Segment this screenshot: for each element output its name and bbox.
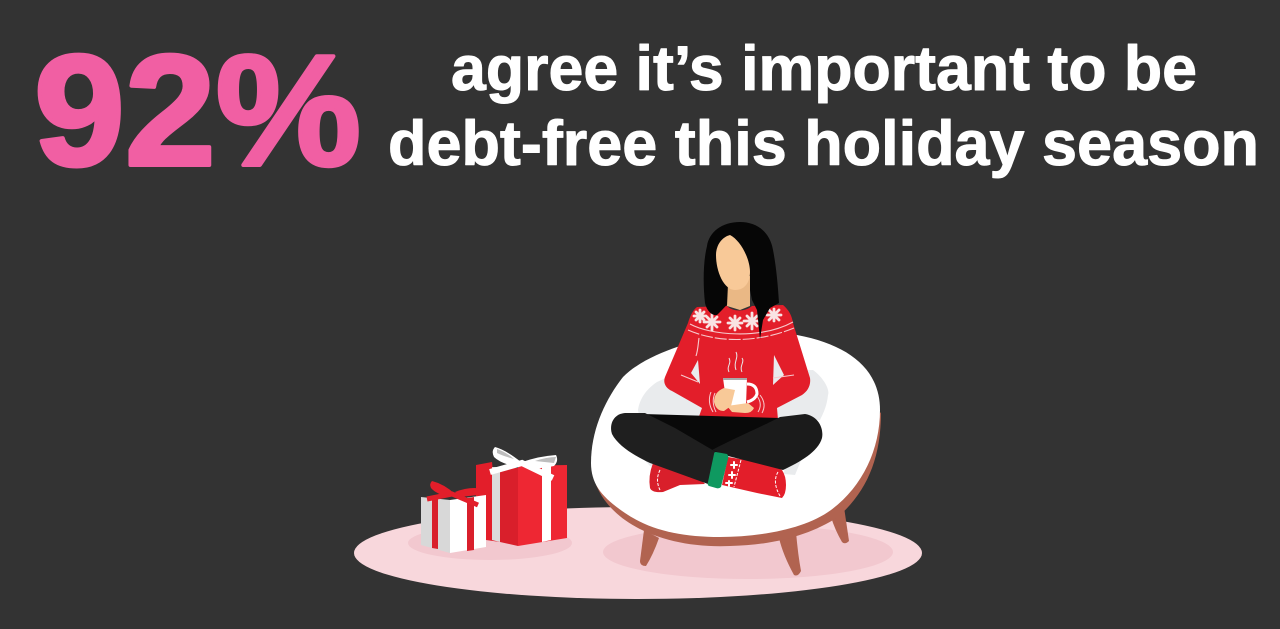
sweater xyxy=(664,305,810,422)
neck xyxy=(727,276,750,310)
statistic: 92%: 92% xyxy=(34,23,361,199)
hair xyxy=(704,222,779,339)
heading: agree it's important to be debt-free this holiday season xyxy=(388,34,1259,179)
pants xyxy=(611,413,822,484)
bow: large gift xyxy=(490,447,557,478)
face xyxy=(716,235,750,290)
gaps between arms and body xyxy=(691,355,784,385)
snowflakes on sweater xyxy=(694,309,781,330)
left sock xyxy=(649,463,705,492)
heading: agree it's important to be debt-free this holiday season: agree it’s important to be xyxy=(451,34,1197,104)
chair cushion xyxy=(591,334,880,537)
chair rim xyxy=(592,412,881,546)
bow: small gift xyxy=(427,481,483,505)
sweater trim xyxy=(681,322,794,382)
large gift xyxy=(476,447,567,546)
chair legs xyxy=(640,507,849,576)
steam xyxy=(728,352,743,372)
sleeve cuffs xyxy=(709,392,764,413)
cushion shading xyxy=(638,370,828,475)
hands xyxy=(714,388,754,413)
chair shadow xyxy=(603,525,893,579)
green cuff xyxy=(708,452,728,488)
small gift xyxy=(421,481,486,553)
heading: agree it's important to be debt-free this holiday season: debt-free this holiday season xyxy=(388,109,1259,179)
illustration: woman with mug in armchair beside gifts xyxy=(354,222,922,599)
rug xyxy=(354,507,922,599)
right sock xyxy=(722,457,786,498)
mug xyxy=(723,378,757,408)
gift shadow xyxy=(408,526,572,560)
